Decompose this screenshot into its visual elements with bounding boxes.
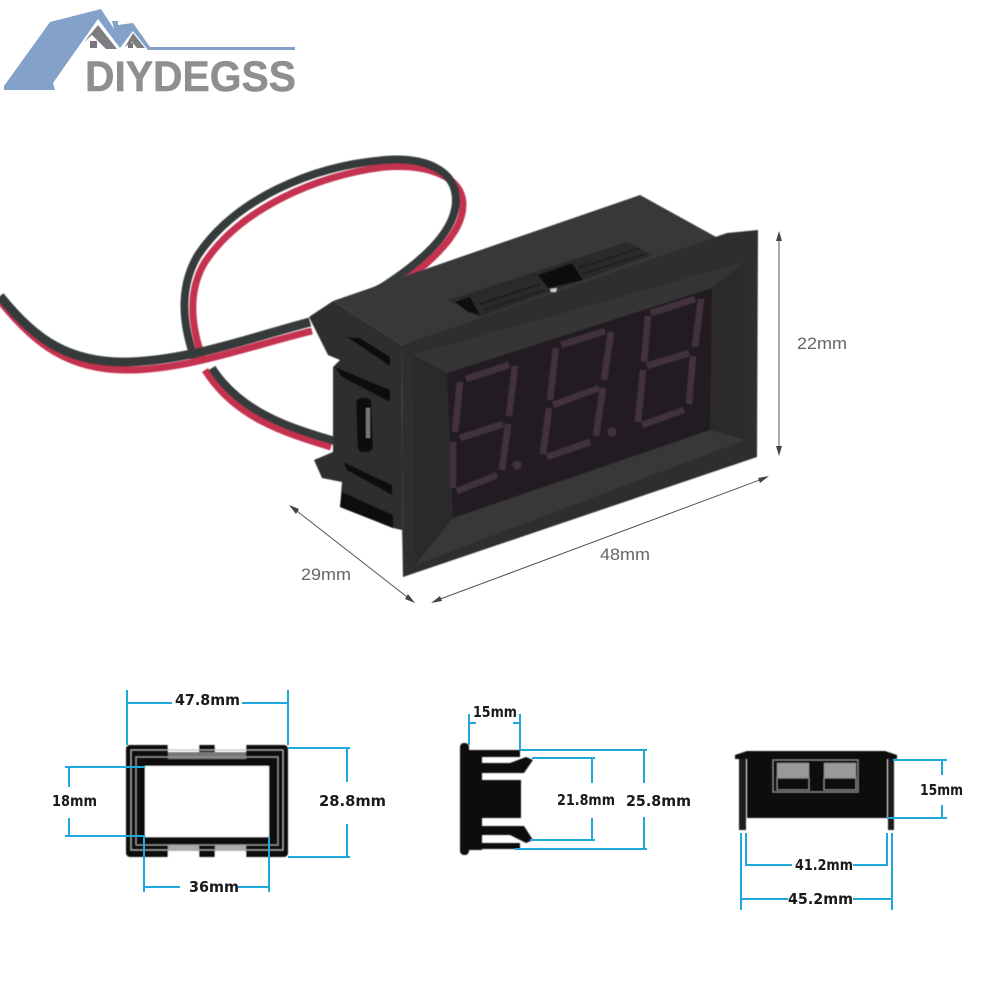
label: 47.8mm: 47.8mm <box>175 691 240 709</box>
label: 15mm: 15mm <box>473 703 517 721</box>
side slots <box>335 337 393 528</box>
label: 22mm: 22mm <box>797 334 847 353</box>
label: 25.8mm: 25.8mm <box>626 792 691 810</box>
top profile <box>735 751 897 830</box>
front frame <box>402 230 758 577</box>
blue dimension lines <box>741 760 947 910</box>
label: 18mm: 18mm <box>52 792 97 810</box>
wires <box>0 160 463 447</box>
label: 36mm: 36mm <box>189 878 239 896</box>
logo: Diydegss <box>4 9 296 101</box>
side housing with clips <box>309 301 403 577</box>
label: 45.2mm: 45.2mm <box>788 890 853 908</box>
side port <box>356 398 373 452</box>
display window <box>447 288 712 518</box>
schematic: top view <box>735 751 963 910</box>
logo: Diydegss: DIYDEGSS <box>85 53 296 101</box>
arrow: height <box>776 231 782 456</box>
arrow: depth <box>289 505 415 603</box>
arrow: width <box>431 476 769 603</box>
label: 21.8mm: 21.8mm <box>557 791 615 809</box>
side profile <box>460 743 533 855</box>
label: 29mm: 29mm <box>301 565 351 584</box>
label: 15mm: 15mm <box>920 781 963 799</box>
schematic: side view <box>460 703 691 855</box>
frame bevels <box>413 262 745 373</box>
blue dimension lines <box>469 714 647 849</box>
top slot <box>448 242 653 317</box>
display digits <box>453 299 701 491</box>
top face <box>333 195 727 345</box>
label: 28.8mm: 28.8mm <box>319 792 386 810</box>
schematic: front view <box>52 690 386 896</box>
blue dimension lines <box>65 690 350 892</box>
voltmeter device <box>309 195 758 577</box>
dimension arrows <box>289 231 782 603</box>
label: 41.2mm: 41.2mm <box>795 856 853 874</box>
label: 48mm: 48mm <box>600 545 650 564</box>
front frame outline <box>126 745 288 857</box>
